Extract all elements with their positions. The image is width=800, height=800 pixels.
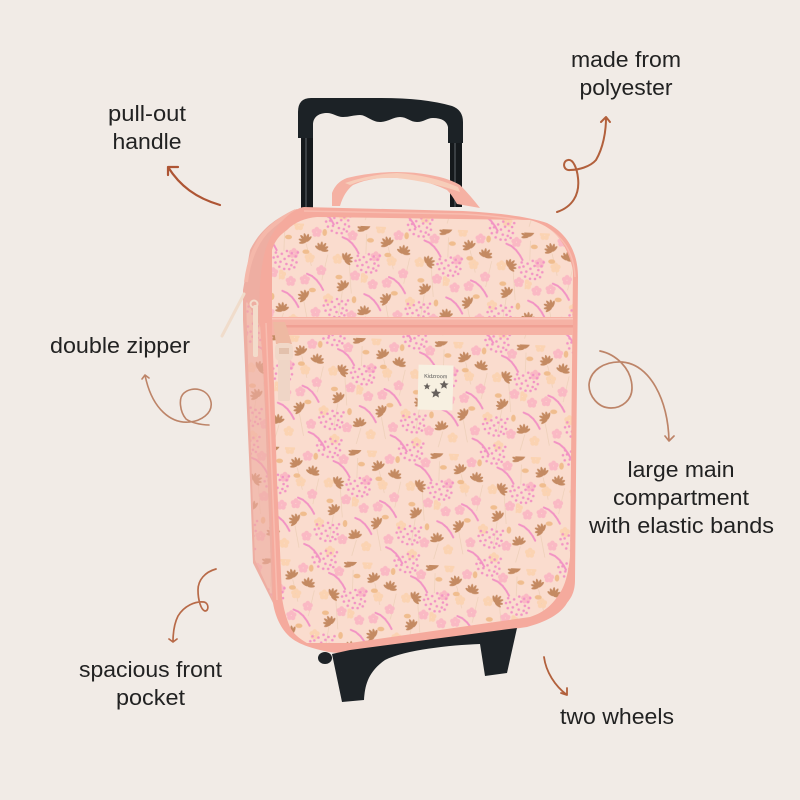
label: made from polyester bbox=[571, 47, 681, 100]
arrow: double zipper bbox=[142, 375, 211, 425]
label: pull-out handle bbox=[108, 101, 186, 154]
side panel bbox=[243, 209, 320, 640]
label: pull-out handle: pull-out bbox=[108, 101, 186, 126]
fabric carry handle bbox=[332, 172, 480, 208]
label: double zipper: double zipper bbox=[50, 333, 190, 358]
arrow: polyester bbox=[557, 117, 610, 212]
suitcase bbox=[222, 98, 578, 702]
label: large main compartment: with elastic bands bbox=[588, 513, 774, 538]
side zipper pull and cord bbox=[222, 294, 258, 357]
label: spacious front pocket: spacious front bbox=[79, 657, 222, 682]
front pocket zipper bbox=[272, 317, 573, 335]
side zipper tape bbox=[246, 211, 296, 282]
label: spacious front pocket bbox=[79, 657, 222, 710]
pull-out handle grip bbox=[298, 98, 463, 143]
label: large main compartment bbox=[588, 457, 774, 538]
label: pull-out handle: handle bbox=[112, 129, 182, 154]
kidzroom label bbox=[417, 365, 454, 410]
front panel border bbox=[260, 207, 578, 653]
handle floral strip bbox=[345, 173, 460, 192]
border highlight bbox=[266, 211, 575, 600]
arrow: two wheels bbox=[544, 657, 567, 695]
side panel pattern bbox=[246, 300, 272, 597]
arrow: large main compartment bbox=[589, 351, 674, 441]
kidzroom label: Kidzroom bbox=[424, 374, 448, 380]
label: made from polyester: polyester bbox=[580, 75, 672, 100]
label: two wheels: two wheels bbox=[560, 704, 674, 729]
arrow: front pocket bbox=[169, 569, 216, 642]
zipper pull tab bbox=[273, 322, 293, 401]
wheel housing bbox=[318, 628, 517, 702]
label: made from polyester: made from bbox=[571, 47, 681, 72]
label: large main compartment: large main bbox=[628, 457, 734, 482]
front panel floral fabric bbox=[272, 217, 573, 643]
label: large main compartment: compartment bbox=[613, 485, 749, 510]
telescopic poles bbox=[301, 135, 462, 208]
stars bbox=[423, 380, 449, 398]
arrow: pull-out handle bbox=[168, 167, 220, 205]
label: spacious front pocket: pocket bbox=[116, 685, 185, 710]
